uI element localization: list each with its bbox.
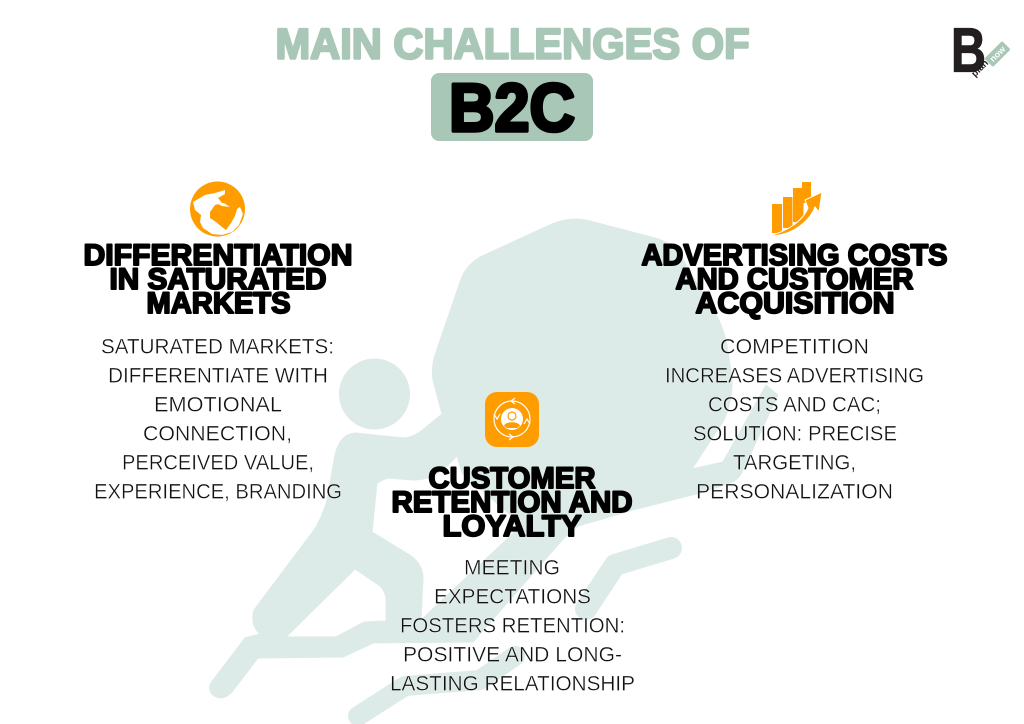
logo: B — [951, 16, 986, 86]
icon: customer retention cycle — [485, 392, 539, 447]
heading: customer retention: CUSTOMER — [428, 462, 596, 495]
text block: customer retention: MEETING — [464, 556, 560, 580]
heading: customer retention: RETENTION AND — [392, 486, 632, 519]
heading: advertising costs: ACQUISITION — [696, 287, 894, 320]
text block: advertising costs: SOLUTION: PRECISE — [693, 422, 897, 446]
heading: differentiation: MARKETS — [146, 287, 290, 320]
icon: rising bar chart with arrow — [768, 182, 822, 236]
heading: differentiation: DIFFERENTIATION — [84, 239, 352, 272]
text block: differentiation: SATURATED MARKETS: — [101, 334, 334, 358]
title badge: B2C: B2C — [449, 70, 575, 146]
text block: advertising costs: COMPETITION — [720, 334, 869, 358]
text block: customer retention — [390, 556, 635, 696]
logo: plan — [969, 58, 991, 79]
logo: now — [988, 43, 1008, 64]
text block: differentiation: PERCEIVED VALUE, — [122, 450, 314, 474]
title: MAIN CHALLENGES OF — [276, 20, 750, 68]
text block: differentiation: EMOTIONAL — [154, 392, 282, 416]
text block: differentiation: DIFFERENTIATE WITH — [108, 364, 328, 388]
text block: advertising costs: COSTS AND CAC; — [708, 392, 881, 416]
text block: advertising costs: TARGETING, — [733, 450, 856, 474]
text block: customer retention: POSITIVE AND LONG- — [403, 642, 622, 666]
text block: advertising costs: PERSONALIZATION — [696, 480, 893, 504]
icon: globe — [190, 182, 245, 236]
heading: advertising costs — [642, 239, 948, 320]
heading: differentiation — [84, 239, 352, 320]
text block: differentiation: EXPERIENCE, BRANDING — [94, 480, 342, 504]
heading: differentiation: IN SATURATED — [110, 263, 326, 296]
text block: differentiation — [94, 334, 342, 504]
heading: advertising costs: AND CUSTOMER — [676, 263, 914, 296]
background silhouette: person pushing boulder — [210, 219, 778, 716]
heading: advertising costs: ADVERTISING COSTS — [642, 239, 948, 272]
text block: customer retention: LASTING RELATIONSHIP — [390, 672, 635, 696]
text block: differentiation: CONNECTION, — [143, 422, 292, 446]
text block: advertising costs: INCREASES ADVERTISING — [665, 364, 924, 388]
text block: customer retention: FOSTERS RETENTION: — [400, 614, 625, 638]
heading: customer retention: LOYALTY — [442, 510, 582, 543]
text block: advertising costs — [665, 334, 924, 504]
heading: customer retention — [392, 462, 632, 543]
text block: customer retention: EXPECTATIONS — [434, 584, 591, 608]
